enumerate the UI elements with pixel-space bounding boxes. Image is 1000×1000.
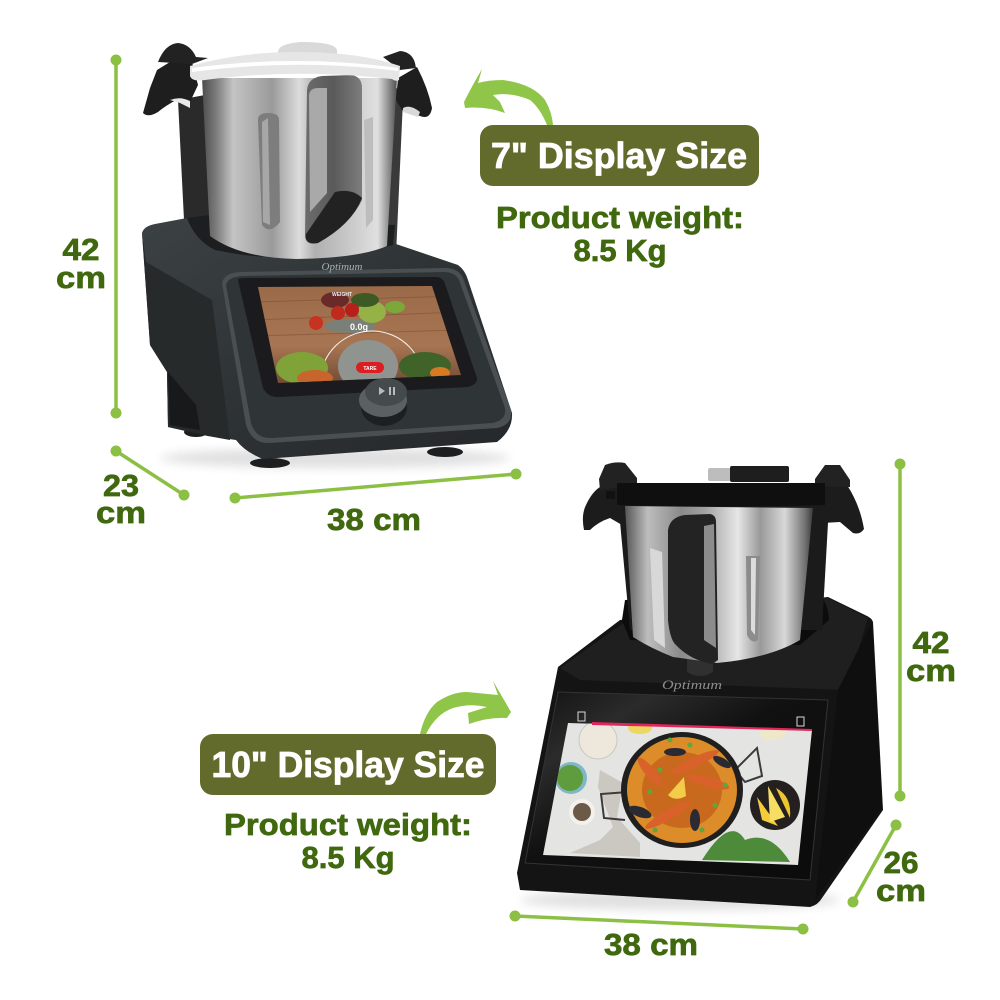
dimension: width of 10 inch model bbox=[510, 910, 808, 962]
arrow: to 7 inch display bbox=[464, 69, 553, 125]
dimension: height of 10 inch model: cm bbox=[906, 653, 956, 688]
neck bbox=[687, 655, 713, 676]
text: product weight 7 inch bbox=[496, 200, 744, 268]
front panel frame bbox=[222, 268, 511, 443]
collar shadow bbox=[622, 590, 829, 645]
screen bbox=[540, 720, 815, 870]
lid bbox=[190, 42, 400, 81]
screen: WEIGHT bbox=[332, 292, 352, 298]
brand logo: Optimum bbox=[662, 677, 722, 692]
badge: 7 inch display size bbox=[480, 125, 759, 186]
text: product weight 10 inch bbox=[224, 807, 472, 875]
text: product weight 7 inch: 8.5 Kg bbox=[574, 233, 666, 268]
text: product weight 10 inch: 8.5 Kg bbox=[302, 840, 394, 875]
dimension: height of 7 inch model: cm bbox=[56, 260, 106, 295]
screen accent bar bbox=[592, 722, 812, 731]
lid with dial bbox=[606, 466, 825, 506]
base bbox=[517, 597, 883, 907]
dimension: depth of 7 inch model: cm bbox=[96, 495, 146, 530]
left arm bbox=[583, 462, 637, 530]
dimension: width of 7 inch model bbox=[230, 468, 522, 537]
dimension: depth of 7 inch model bbox=[96, 446, 190, 530]
arrow: to 10 inch display bbox=[420, 681, 511, 734]
text: product weight 7 inch: Product weight: bbox=[496, 200, 744, 235]
text: product weight 10 inch: Product weight: bbox=[224, 807, 472, 842]
screen icons bbox=[578, 712, 804, 726]
dimension: depth of 10 inch model: cm bbox=[876, 873, 926, 908]
product: 10 inch cooking robot bbox=[517, 462, 883, 910]
steel bowl bbox=[625, 506, 813, 663]
dimension: depth of 10 inch model bbox=[848, 820, 926, 908]
badge: 10 inch display size: 10" Display Size bbox=[212, 744, 484, 785]
bowl handle bbox=[668, 514, 718, 664]
screen: 0.0g bbox=[350, 322, 368, 332]
right arm bbox=[383, 51, 432, 117]
base bbox=[142, 218, 512, 459]
screen bbox=[258, 286, 461, 383]
dimension: height of 10 inch model: 42 bbox=[912, 625, 950, 660]
dimension: height of 7 inch model bbox=[56, 54, 122, 418]
screen bezel bbox=[238, 277, 477, 397]
rear dark column behind the bowl bbox=[178, 95, 215, 245]
brand logo: Optimum bbox=[322, 261, 363, 273]
dimension: width of 7 inch model: 38 cm bbox=[327, 502, 421, 537]
left arm bbox=[143, 43, 208, 115]
dimension: depth of 7 inch model: 23 bbox=[103, 468, 139, 503]
bowl handle bbox=[305, 75, 362, 244]
product: 7 inch cooking robot bbox=[142, 42, 512, 468]
right arm bbox=[815, 465, 864, 534]
dimension: height of 10 inch model bbox=[894, 458, 956, 802]
screen bezel bbox=[525, 692, 828, 880]
feet bbox=[184, 427, 463, 468]
badge: 10 inch display size bbox=[200, 734, 496, 795]
dimension: width of 10 inch model: 38 cm bbox=[604, 927, 698, 962]
badge: 7 inch display size: 7" Display Size bbox=[491, 135, 747, 176]
steel bowl bbox=[202, 78, 397, 259]
dimension: height of 7 inch model: 42 bbox=[62, 232, 100, 267]
collar around the bowl bbox=[187, 215, 395, 258]
rear column bbox=[618, 500, 829, 630]
dimension: depth of 10 inch model: 26 bbox=[884, 845, 918, 880]
screen: TARE bbox=[363, 366, 377, 372]
control knob bbox=[359, 378, 407, 426]
